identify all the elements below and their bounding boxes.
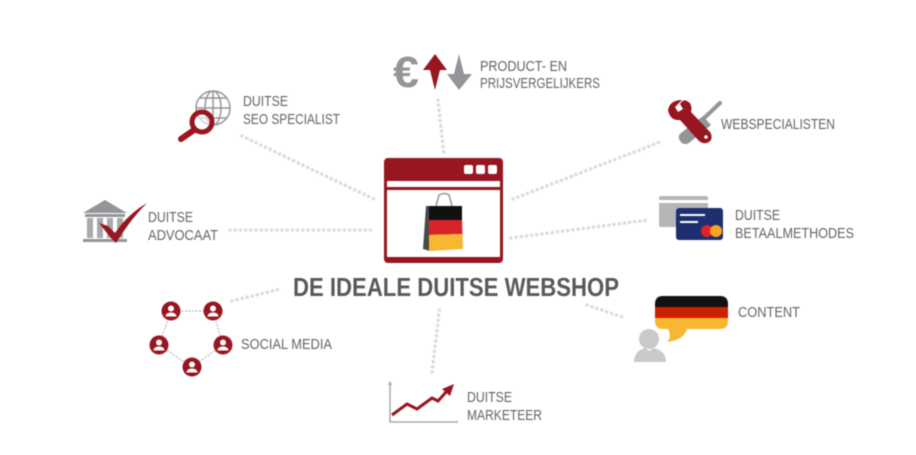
icon: euro and up/down arrows: € <box>393 48 419 97</box>
item: duitse betaalmethodes <box>659 196 854 242</box>
icon: wrench and screwdriver <box>668 100 720 144</box>
label: duitse seo specialist: DUITSE <box>243 94 288 110</box>
label: duitse betaalmethodes: BETAALMETHODES <box>735 226 854 242</box>
label: content: CONTENT <box>738 305 800 321</box>
label: duitse betaalmethodes: DUITSE <box>735 208 780 224</box>
icon: euro and up/down arrows <box>393 48 472 97</box>
label: duitse advocaat: DUITSE <box>148 210 193 226</box>
label: duitse seo specialist: SEO SPECIALIST <box>243 112 340 128</box>
item: product- en prijsvergelijkers <box>393 48 600 97</box>
icon: speech bubble with german flag and person <box>634 296 728 362</box>
icon: globe with magnifier <box>181 91 230 139</box>
icon: payment cards <box>659 196 723 240</box>
label: product- en prijsvergelijkers: PRODUCT- EN <box>480 59 567 75</box>
item: duitse seo specialist <box>181 91 340 139</box>
item: webspecialisten <box>668 100 835 144</box>
label: duitse advocaat: ADVOCAAT <box>148 228 218 244</box>
label: webspecialisten: WEBSPECIALISTEN <box>721 117 835 133</box>
icon: network of people <box>150 302 232 376</box>
label: product- en prijsvergelijkers: PRIJSVERGELIJKERS <box>480 76 600 92</box>
item: duitse marketeer <box>388 381 542 424</box>
label: social media: SOCIAL MEDIA <box>241 337 332 353</box>
title: DE IDEALE DUITSE WEBSHOP <box>293 272 619 302</box>
label: duitse marketeer: DUITSE <box>467 390 512 406</box>
item: duitse advocaat <box>83 200 218 244</box>
icon: courthouse with check mark <box>83 200 147 243</box>
icon: rising line chart <box>388 381 458 422</box>
item: social media <box>150 302 332 376</box>
icon: browser window with shopping bag <box>384 158 503 263</box>
label: duitse marketeer: MARKETEER <box>467 408 542 424</box>
item: content <box>634 296 800 362</box>
